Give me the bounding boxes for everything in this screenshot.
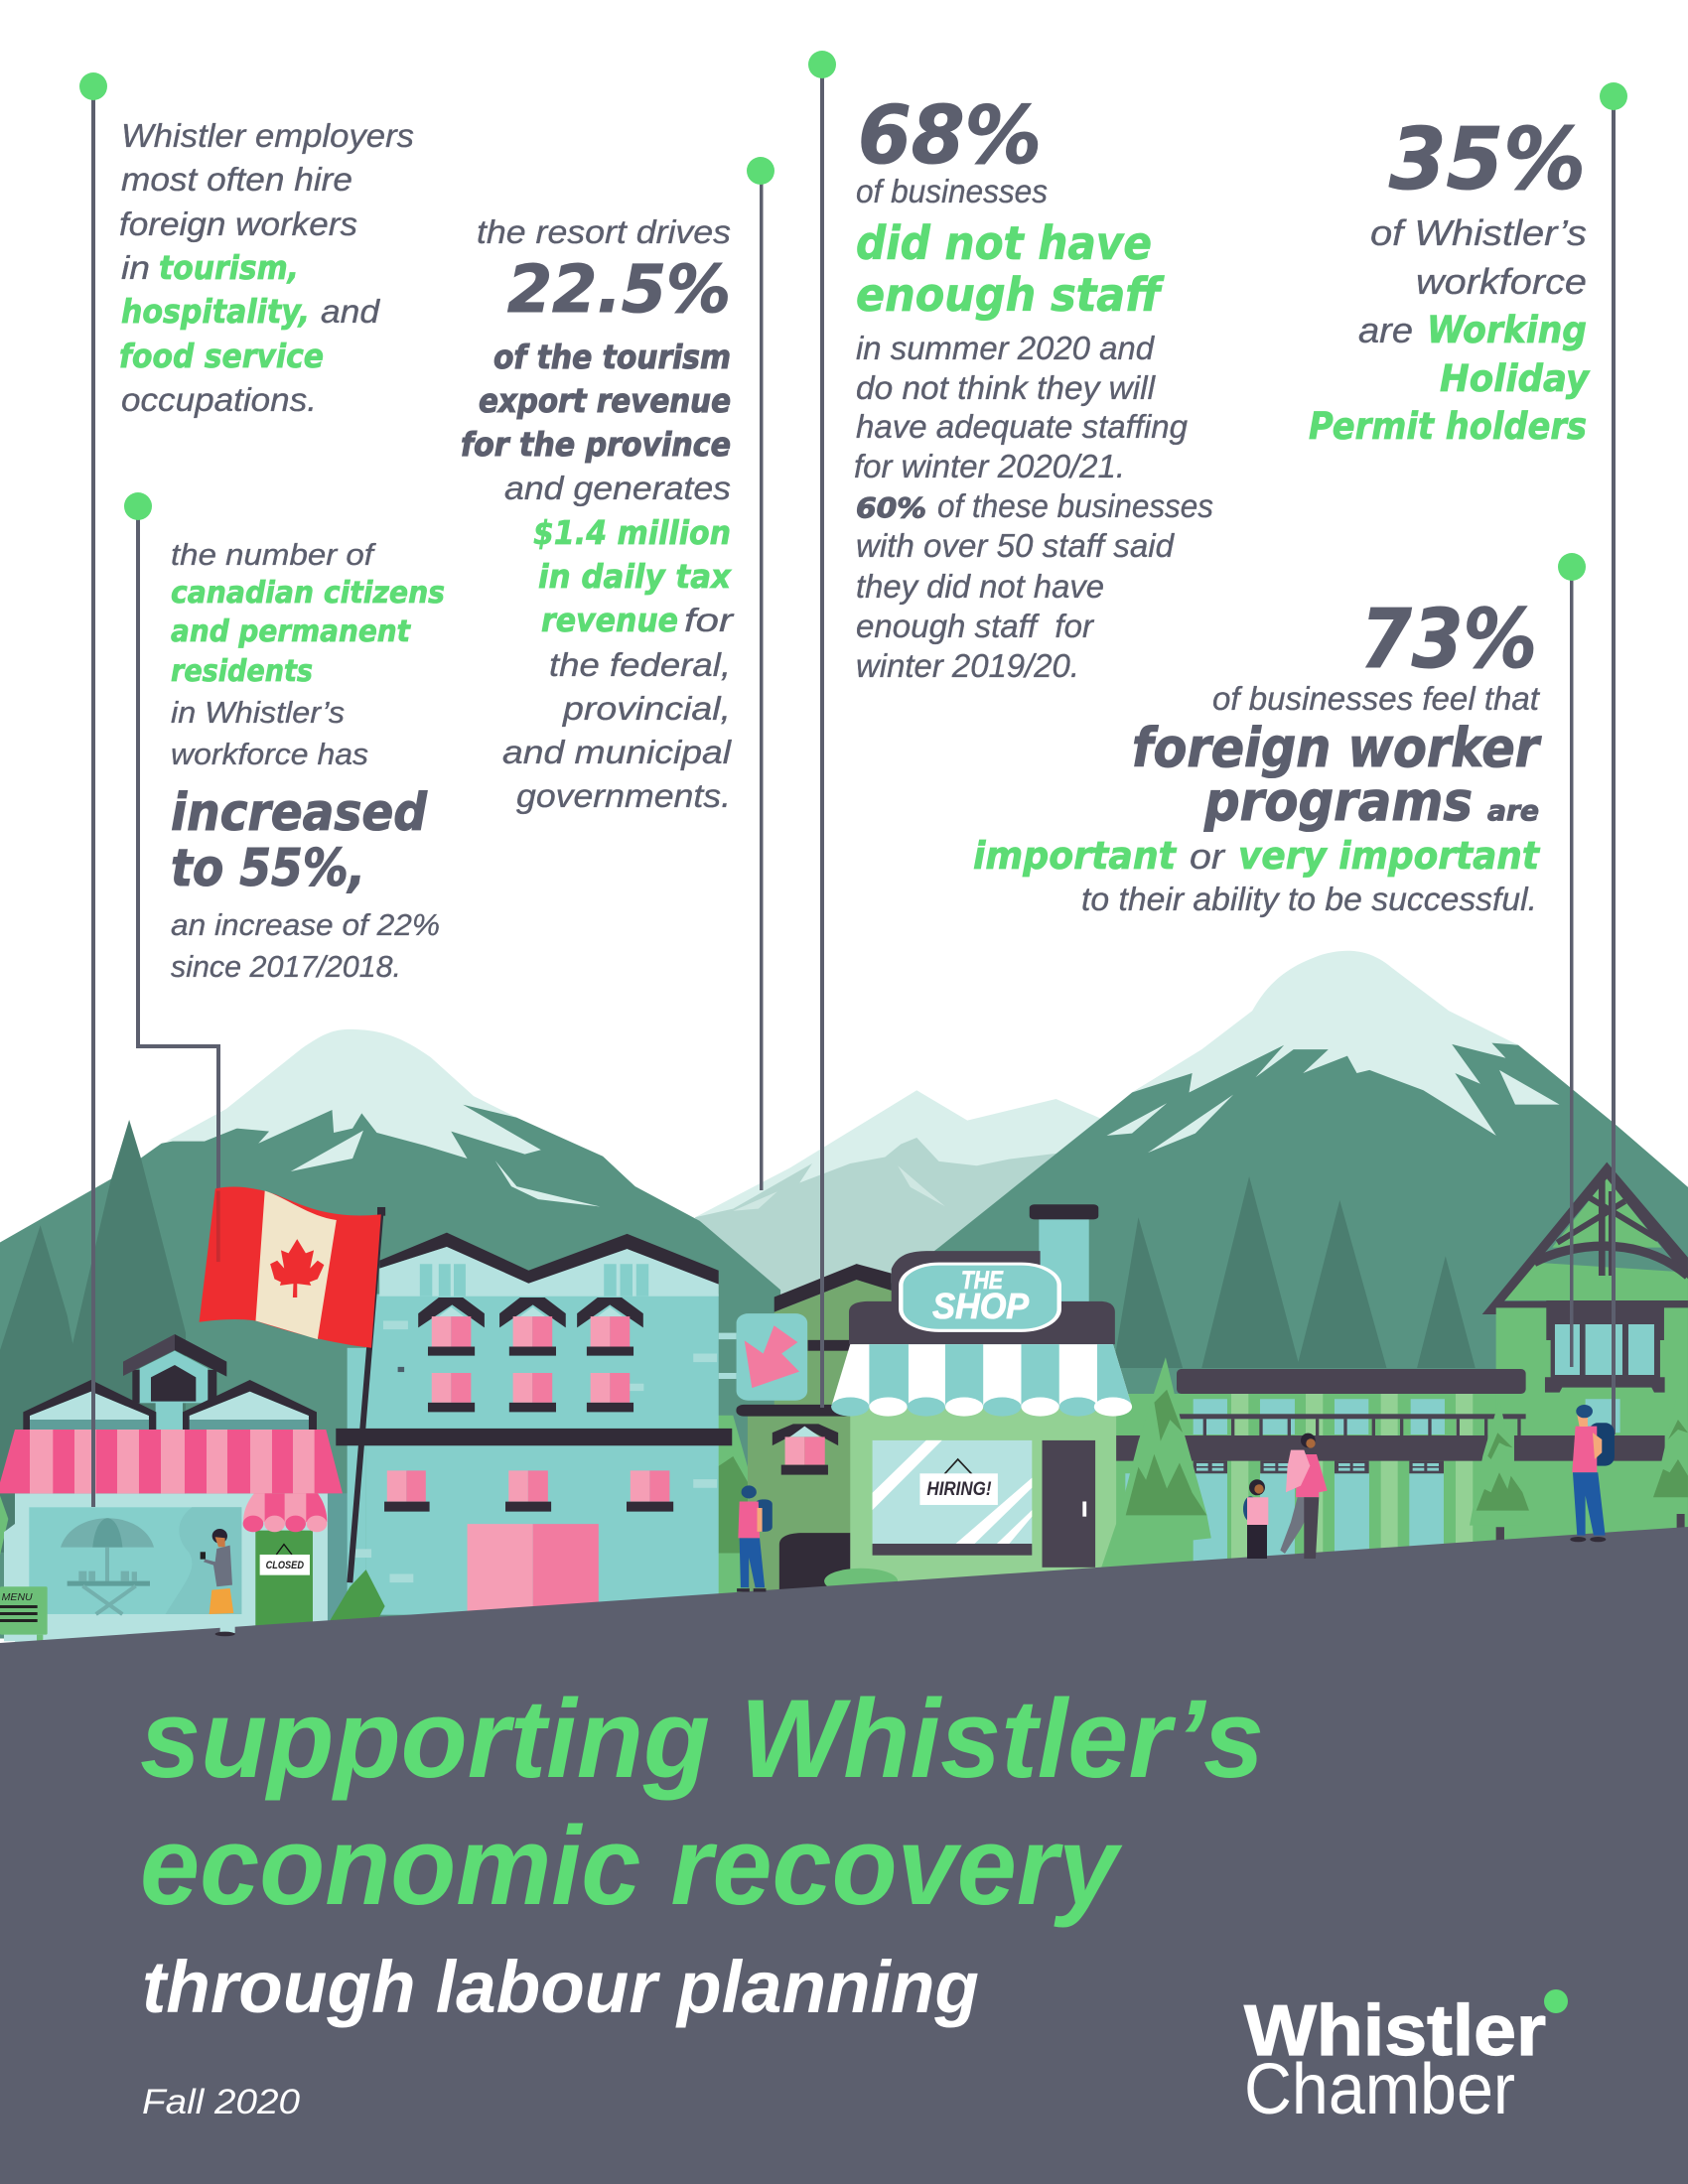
text block: working holiday permit holders: Working [1427,309,1587,351]
hiker [1570,1405,1615,1542]
big fir tree [1100,1357,1211,1570]
text block: canadian citizens and permanent residents: residents [171,654,313,689]
person: hiker by green building [737,1485,773,1592]
menu board [0,1586,48,1643]
text block: tourism export revenue: of the tourism [493,338,731,376]
building: the shop [824,1204,1211,1594]
cafe door with closed sign [243,1493,327,1628]
text block: foreign worker occupations: most often hire [121,161,352,198]
text block: staffing shortage: did not have [856,216,1152,270]
text block: canadian citizens and permanent residents [171,537,445,984]
text block: foreign worker occupations: and [321,293,381,330]
logo: Whistler Chamber: Chamber [1244,2050,1515,2129]
text block: canadian citizens and permanent residents: in Whistler’s [171,695,345,730]
left mountain [0,1029,780,1639]
text block: tourism export revenue: revenue [541,601,678,639]
title: supporting Whistler’s [140,1677,1264,1801]
text block: tourism export revenue: the federal, [549,646,731,683]
text block: foreign worker programs: to their ability to be successful. [1081,881,1537,917]
text block: staffing shortage: enough staff for [856,608,1095,644]
text block: staffing shortage: do not think they will [856,369,1157,406]
text block: foreign worker programs: foreign worker [1132,717,1542,779]
gable roof [1504,1178,1688,1300]
street [0,1527,1688,2184]
connector: tourism revenue [747,157,774,1190]
text block: canadian citizens and permanent residents: the number of [171,537,377,572]
text block: canadian citizens and permanent residents: canadian citizens [171,576,445,611]
text block: canadian citizens and permanent residents: an increase of 22% [171,907,440,942]
text block: foreign worker programs: are [1487,794,1539,827]
text block: tourism export revenue: and generates [504,470,731,506]
shop window with hiring sign: HIRING! [926,1478,991,1500]
shop window with hiring sign [873,1440,1032,1556]
text block: tourism export revenue: $1.4 million [533,513,731,552]
text block: foreign worker programs: or [1190,836,1226,877]
hotel lower windows and door [384,1470,673,1614]
text block: tourism export revenue: in daily tax [538,557,733,596]
text block: foreign worker occupations: foreign workers [119,205,357,242]
connector: staffing [808,51,836,1408]
text block: foreign worker occupations: in [121,249,150,286]
shop door [1043,1440,1095,1568]
shop sign: SHOP [932,1287,1029,1326]
child [1243,1479,1268,1559]
title: economic recovery [140,1804,1123,1928]
canadian flag [200,1186,385,1582]
text block: staffing shortage: winter 2019/20. [856,647,1079,684]
text block: foreign worker occupations: tourism, [159,248,299,287]
text block: canadian citizens and permanent residents: and permanent [171,614,412,649]
text block: working holiday permit holders: of Whistler’s [1370,212,1587,253]
building: teal hotel [330,1233,807,1628]
adult [1280,1433,1328,1559]
text block: staffing shortage: for winter 2020/21. [854,448,1125,484]
bush [824,1569,898,1594]
person: woman with bag [201,1529,235,1636]
building: long lodge and green house [1115,1162,1688,1572]
text block: tourism export revenue: for the province [461,425,731,464]
connector: foreign worker programs [1558,553,1586,1367]
text block: tourism export revenue: and municipal [502,734,733,770]
connector: foreign worker occupations [79,72,107,1507]
fir trees by the lodge [1470,1400,1529,1526]
text block: tourism export revenue: export revenue [479,381,731,420]
text block: staffing shortage: 60% [856,491,926,524]
text block: foreign worker occupations: hospitality, [121,292,310,331]
text block: staffing shortage: they did not have [856,568,1104,605]
text block: foreign worker occupations [119,117,414,418]
text block: staffing shortage: with over 50 staff said [856,527,1176,564]
connector: working holiday permit [1600,82,1627,1434]
text block: staffing shortage: 68% [858,89,1042,182]
text block: staffing shortage: enough staff [856,268,1165,322]
connector: canadian citizens [124,492,218,1191]
shop sign: THE [961,1266,1004,1294]
text block: staffing shortage: have adequate staffing [856,408,1189,445]
small fir [330,1570,385,1621]
text block: foreign worker occupations: occupations. [121,381,317,418]
text block: working holiday permit holders: workforce [1416,261,1587,302]
date: Fall 2020 [142,2083,301,2121]
background fir trees [1113,1176,1476,1368]
text block: foreign worker programs: 73% [1360,593,1537,687]
text block: tourism export revenue: provincial, [562,690,731,727]
right mountain [783,951,1688,1536]
cafe window with patio table [29,1507,241,1614]
back mountain [695,1090,1113,1364]
menu board: MENU [2,1592,33,1603]
text block: staffing shortage [854,89,1213,684]
striped awning [0,1430,343,1493]
text block: foreign worker programs: of businesses feel that [1212,680,1541,717]
text block: tourism export revenue: governments. [516,777,731,814]
text block: foreign worker programs: very important [1238,834,1541,878]
text block: tourism export revenue: 22.5% [507,251,731,328]
text block: foreign worker programs: programs [1203,770,1473,833]
text block: working holiday permit holders: Permit holders [1309,405,1587,448]
building: small green building with arch [717,1264,894,1596]
cafe gables [30,1392,309,1420]
text block: working holiday permit holders: are [1358,310,1413,350]
text block: tourism export revenue [461,213,736,814]
text block: foreign worker programs [973,593,1542,917]
house window block [1545,1300,1665,1393]
text block: working holiday permit holders [1309,110,1591,448]
text block: staffing shortage: of businesses [856,173,1048,209]
connector lines [79,51,1627,1507]
text block: tourism export revenue: for [684,602,736,638]
text block: foreign worker occupations: food service [119,337,324,375]
building: small cafe [0,1334,348,1645]
text block: canadian citizens and permanent residents: increased [171,783,428,843]
text block: canadian citizens and permanent residents: workforce has [171,737,368,771]
hotel upper windows [418,1297,643,1412]
shop awning [831,1344,1132,1407]
shop sign [901,1264,1059,1330]
arrow sign [719,1313,807,1401]
text block: staffing shortage: of these businesses [937,487,1213,524]
text block: tourism export revenue: the resort drives [477,213,731,250]
cafe body [4,1493,328,1645]
subtitle: through labour planning [142,1946,979,2028]
logo: Whistler Chamber [1244,1989,1568,2129]
text block: canadian citizens and permanent residents: since 2017/2018. [171,949,401,984]
logo: Whistler Chamber: Whistler [1244,1991,1546,2071]
cafe dormer [132,1370,216,1403]
people: child, adult and hiker on the right [1243,1405,1615,1559]
text block: foreign worker occupations: Whistler employers [121,117,414,154]
text block: foreign worker programs: important [973,834,1178,878]
text block: canadian citizens and permanent residents: to 55%, [171,839,365,898]
text block: staffing shortage: in summer 2020 and [856,330,1156,366]
text block: working holiday permit holders: 35% [1389,110,1586,209]
title [140,1677,1264,1928]
cafe door with closed sign: CLOSED [266,1560,304,1571]
text block: working holiday permit holders: Holiday [1440,357,1591,400]
left fir trees [0,1120,186,1553]
